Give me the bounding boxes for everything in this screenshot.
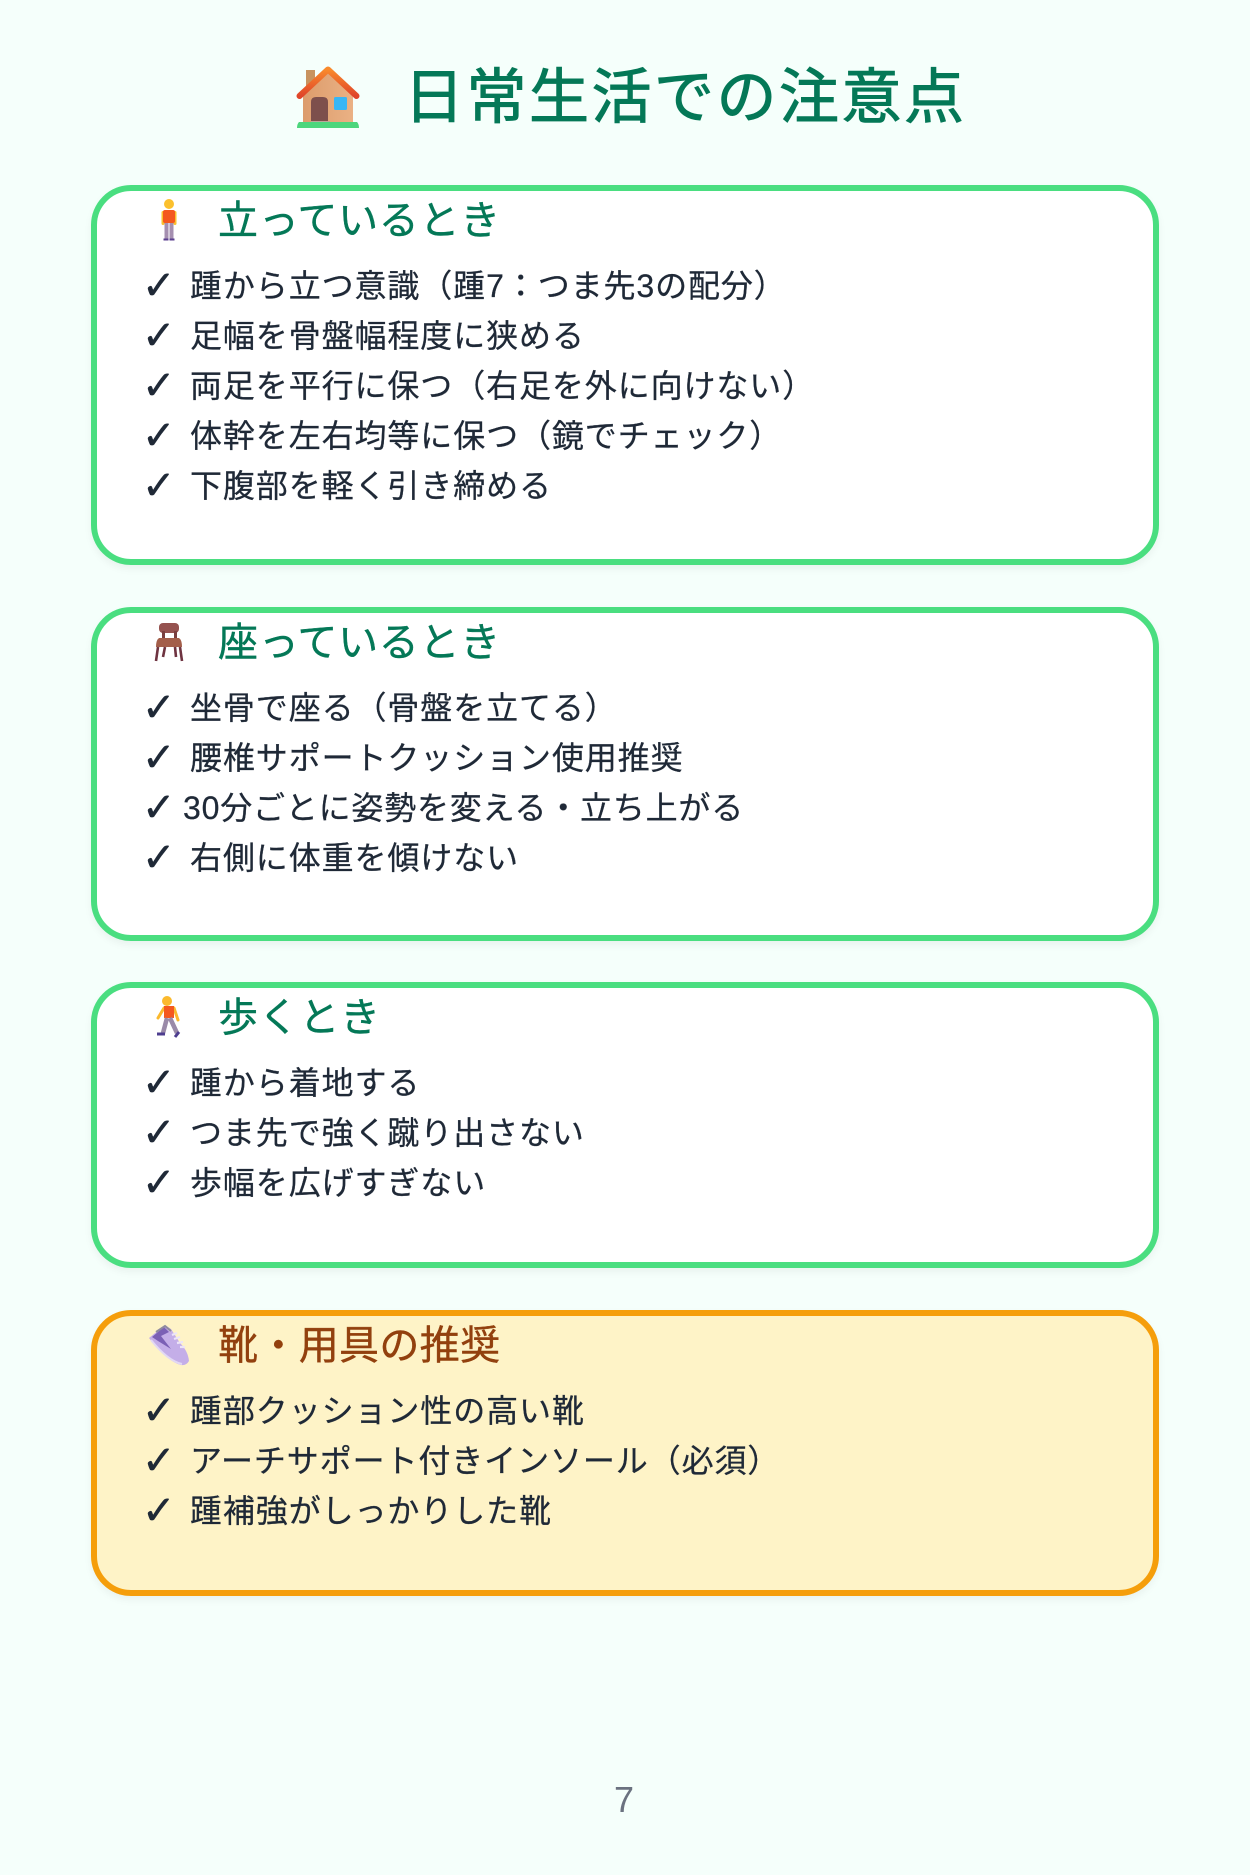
list: shoes and gear: 踵補強がしっかりした靴 (190, 1493, 552, 1529)
list: sitting: 30分ごとに姿勢を変える・立ち上がる (183, 790, 744, 826)
list: standing: ✓ (142, 413, 176, 459)
list: shoes and gear: ✓ (142, 1438, 176, 1484)
list: walking: ✓ (142, 1160, 176, 1206)
list: walking: 歩幅を広げすぎない (190, 1165, 486, 1201)
list: shoes and gear: 踵部クッション性の高い靴 (190, 1393, 585, 1429)
list: standing: 踵から立つ意識（踵7：つま先3の配分） (190, 268, 787, 304)
panel: sitting (91, 606, 1159, 941)
icon: chair (154, 623, 184, 662)
list: walking: 踵から着地する (190, 1065, 420, 1101)
list: shoes and gear: ✓ (142, 1388, 176, 1434)
list: standing: ✓ (142, 313, 176, 359)
list: shoes and gear: ✓ (142, 1488, 176, 1534)
icon: standing person (162, 199, 176, 240)
list: sitting: ✓ (142, 735, 176, 781)
list: standing: ✓ (142, 463, 176, 509)
list: sitting: ✓ (142, 685, 176, 731)
list: standing: 足幅を骨盤幅程度に狭める (190, 318, 585, 354)
heading: sitting: 座っているとき (218, 621, 501, 665)
panel: walking (91, 982, 1159, 1268)
panel: shoes and gear (91, 1310, 1159, 1596)
heading: walking: 歩くとき (218, 996, 381, 1040)
list: sitting (142, 685, 744, 881)
list: standing: ✓ (142, 263, 176, 309)
list: standing: ✓ (142, 363, 176, 409)
title: 日常生活での注意点 (404, 64, 966, 131)
heading: shoes and gear: 靴・用具の推奨 (218, 1324, 500, 1368)
heading: standing: 立っているとき (218, 199, 501, 243)
panel: standing (91, 184, 1159, 565)
list: sitting: 腰椎サポートクッション使用推奨 (190, 740, 684, 776)
list: sitting: ✓ (142, 785, 176, 831)
list: sitting: 坐骨で座る（骨盤を立てる） (190, 690, 618, 726)
list: standing: 下腹部を軽く引き締める (190, 468, 552, 504)
list: walking: つま先で強く蹴り出さない (190, 1115, 585, 1151)
list: walking: ✓ (142, 1060, 176, 1106)
list: sitting: 右側に体重を傾けない (190, 840, 519, 876)
list: shoes and gear: アーチサポート付きインソール（必須） (190, 1443, 780, 1479)
icon: house (296, 66, 360, 128)
page number: 7 (614, 1779, 634, 1820)
list: walking (142, 1060, 585, 1206)
list: standing (142, 263, 815, 509)
icon: walking person (156, 996, 180, 1038)
icon: shoe (149, 1324, 189, 1366)
list: standing: 体幹を左右均等に保つ（鏡でチェック） (190, 418, 782, 454)
list: standing: 両足を平行に保つ（右足を外に向けない） (190, 368, 815, 404)
list: sitting: ✓ (142, 835, 176, 881)
list: walking: ✓ (142, 1110, 176, 1156)
list: shoes and gear (142, 1388, 780, 1534)
